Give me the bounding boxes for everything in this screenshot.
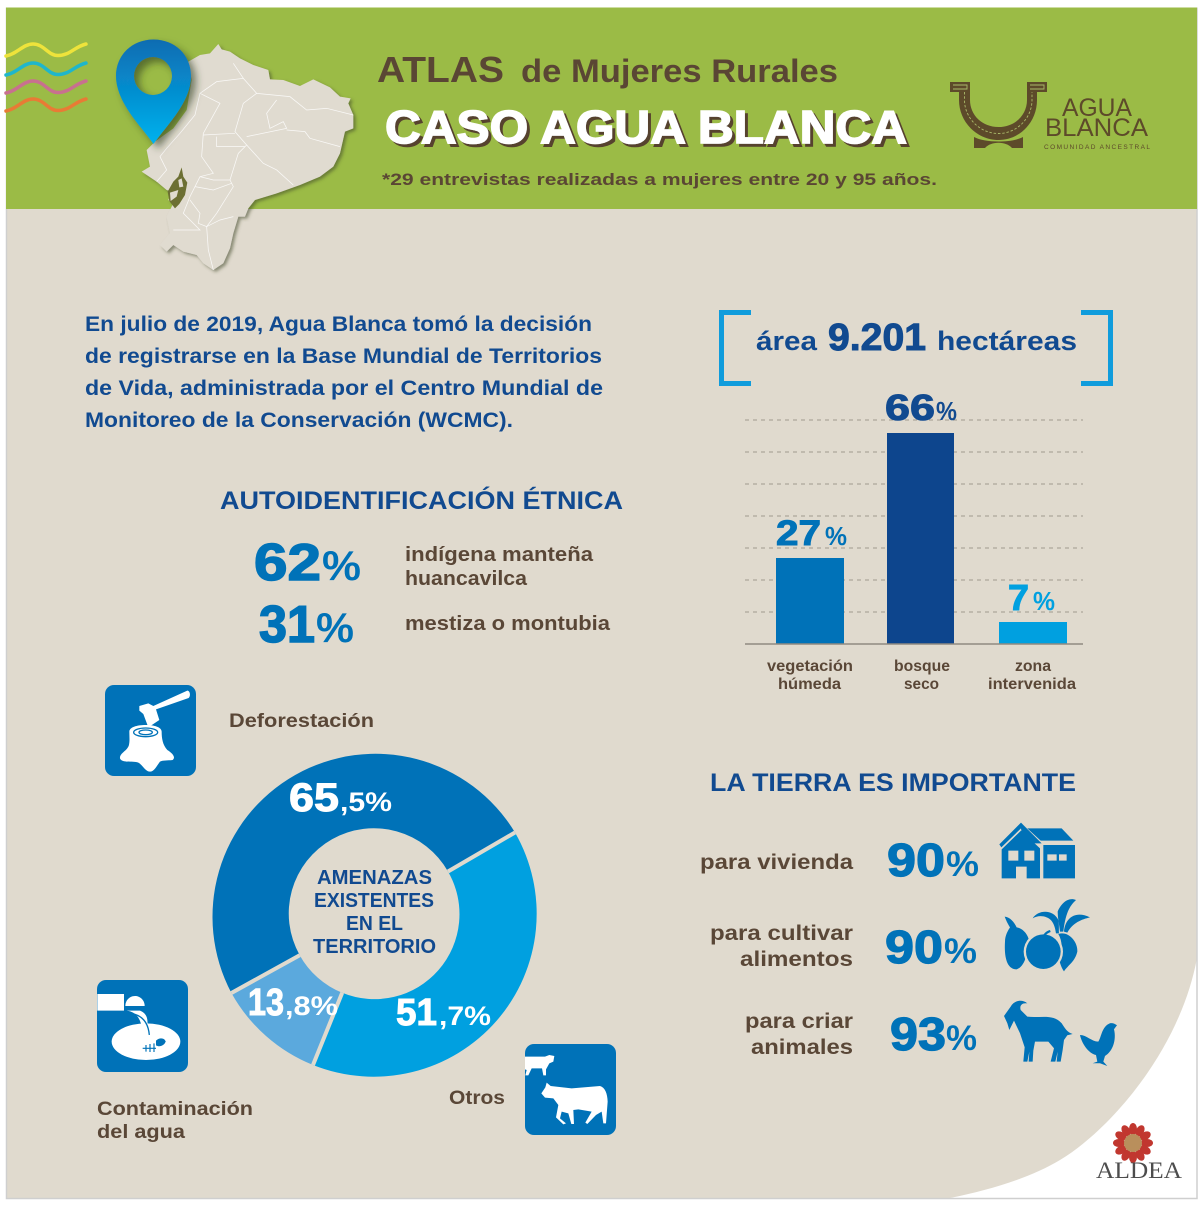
- bar: vegetación húmeda 27%: [767, 514, 853, 693]
- bar: zona intervenida 7%: [988, 577, 1076, 693]
- label: otros: Otros: [449, 1088, 505, 1109]
- title line: atlas: de Mujeres Rurales: [521, 53, 838, 89]
- subtitle: *29 entrevistas realizadas a mujeres entre 20 y 95 años.: [382, 170, 937, 189]
- donut center label: EXISTENTES: [314, 890, 434, 912]
- row: vivienda: %: [946, 845, 979, 884]
- logo: Agua Blanca: BLANCA: [1045, 114, 1148, 142]
- stat: 62%: %: [322, 542, 361, 589]
- bar: zona intervenida 7%: %: [1033, 586, 1055, 616]
- value 13,8%: 13: [248, 982, 284, 1024]
- bar: vegetación húmeda 27%: vegetación: [767, 658, 853, 675]
- bar: bosque seco 66%: seco: [904, 676, 939, 693]
- bar: vegetación húmeda 27%: 27: [776, 514, 821, 553]
- bar chart: land cover: [745, 387, 1083, 693]
- icon: house: [999, 823, 1075, 878]
- panel: amenazas donut chart: [212, 754, 537, 1077]
- stat: 31%: [259, 596, 611, 654]
- left bracket: [722, 312, 751, 384]
- icon: cattle: [525, 1044, 616, 1135]
- label: contaminación del agua: Contaminación: [97, 1099, 253, 1120]
- row: animales: 93: [890, 1008, 946, 1060]
- location pin: [116, 40, 191, 144]
- right bracket: [1081, 312, 1110, 384]
- logo wordmark: AGUA: [1062, 94, 1132, 122]
- logo emblem: [950, 82, 1047, 148]
- row: animales: animales: [751, 1036, 853, 1059]
- stat: 62%: indígena manteña: [405, 544, 594, 566]
- heading: AUTOIDENTIFICACIÓN ÉTNICA: [220, 485, 623, 515]
- value 65,5%: [289, 776, 392, 820]
- icon: water contamination: [97, 980, 188, 1072]
- donut center label: EN EL: [346, 913, 403, 935]
- stat: 31%: %: [316, 604, 354, 651]
- value 51,7%: [396, 992, 491, 1034]
- bar: zona intervenida 7%: intervenida: [988, 676, 1076, 693]
- flower emblem: [1113, 1123, 1153, 1163]
- logo: Agua Blanca: COMUNIDAD ANCESTRAL: [1044, 144, 1150, 151]
- label: contaminación del agua: del agua: [97, 1122, 185, 1143]
- icon: deforestation axe and stump: [105, 685, 196, 776]
- label: contaminación del agua: [97, 1099, 253, 1143]
- segment: contaminación 13,8%: [231, 955, 342, 1065]
- value 51,7%: ,7%: [439, 1001, 491, 1031]
- bar: bosque seco 66%: %: [936, 396, 957, 426]
- icon: vegetables: [1005, 899, 1090, 971]
- value 65,5%: 65: [289, 776, 339, 820]
- row: cultivar: para cultivar: [710, 922, 853, 945]
- area heading text: hectáreas: [937, 326, 1077, 356]
- stat: 62%: [254, 534, 594, 592]
- logo: Agua Blanca: [950, 82, 1150, 151]
- stat: 62%: huancavilca: [405, 568, 528, 590]
- bar: vegetación húmeda 27%: %: [825, 521, 847, 551]
- panel: la tierra es importante: [700, 769, 1117, 1066]
- header band: [6, 8, 1197, 209]
- intro text block: En julio de 2019, Agua Blanca tomó la decisión: [85, 313, 592, 336]
- row: animales: [745, 1001, 1117, 1066]
- bar: vegetación húmeda 27%: húmeda: [778, 676, 841, 693]
- heading: LA TIERRA ES IMPORTANTE: [710, 769, 1076, 797]
- segment: otros 51,7%: [313, 832, 537, 1077]
- value 65,5%: ,5%: [340, 787, 392, 817]
- value 13,8%: [248, 982, 338, 1024]
- stat: 62%: 62: [254, 534, 321, 592]
- bar: zona intervenida 7%: 7: [1008, 577, 1029, 618]
- map of Ecuador: [142, 44, 353, 270]
- intro text block: de registrarse en la Base Mundial de Territorios: [85, 345, 602, 368]
- bar: zona intervenida 7%: zona: [1015, 658, 1051, 675]
- row: vivienda: 90: [887, 834, 945, 886]
- intro text block: [85, 313, 603, 432]
- stat: 31%: mestiza o montubia: [405, 613, 611, 635]
- area heading text: 9.201: [828, 317, 926, 359]
- stat: 31%: 31: [259, 596, 315, 654]
- area heading text: [756, 317, 1077, 359]
- value 13,8%: ,8%: [285, 991, 338, 1021]
- donut center label: AMENAZAS: [317, 867, 432, 889]
- row: vivienda: para vivienda: [700, 851, 853, 874]
- title line: atlas: ATLAS: [377, 49, 504, 90]
- row: cultivar: 90: [885, 921, 943, 973]
- row: vivienda: [700, 823, 1075, 886]
- title line: caso agua blanca: CASO AGUA BLANCA: [385, 101, 907, 153]
- panel: área heading: [722, 312, 1110, 384]
- value 51,7%: 51: [396, 992, 437, 1034]
- donut center label: TERRITORIO: [313, 936, 436, 958]
- row: animales: %: [946, 1019, 977, 1058]
- logo: ALDEA: [1096, 1123, 1182, 1183]
- decorative waves: [6, 44, 86, 111]
- segment: deforestación 65,5%: [212, 754, 515, 993]
- intro text block: Monitoreo de la Conservación (WCMC).: [85, 409, 513, 432]
- wordmark: ALDEA: [1096, 1158, 1182, 1183]
- bar: bosque seco 66%: bosque: [894, 658, 950, 675]
- intro text block: de Vida, administrada por el Centro Mundial de: [85, 377, 603, 400]
- label: deforestación: Deforestación: [229, 711, 374, 732]
- panel: autoidentificación étnica: [220, 485, 623, 654]
- row: cultivar: %: [944, 932, 977, 971]
- area heading text: área: [756, 326, 818, 356]
- row: animales: para criar: [745, 1010, 853, 1033]
- row: cultivar: [710, 899, 1090, 973]
- bar: bosque seco 66%: 66: [885, 387, 935, 428]
- icon: goat and hen: [1004, 1001, 1117, 1066]
- row: cultivar: alimentos: [740, 948, 853, 971]
- title line: atlas: [377, 49, 838, 90]
- bar: bosque seco 66%: [885, 387, 957, 693]
- title: [377, 49, 937, 189]
- donut center label: [313, 867, 436, 958]
